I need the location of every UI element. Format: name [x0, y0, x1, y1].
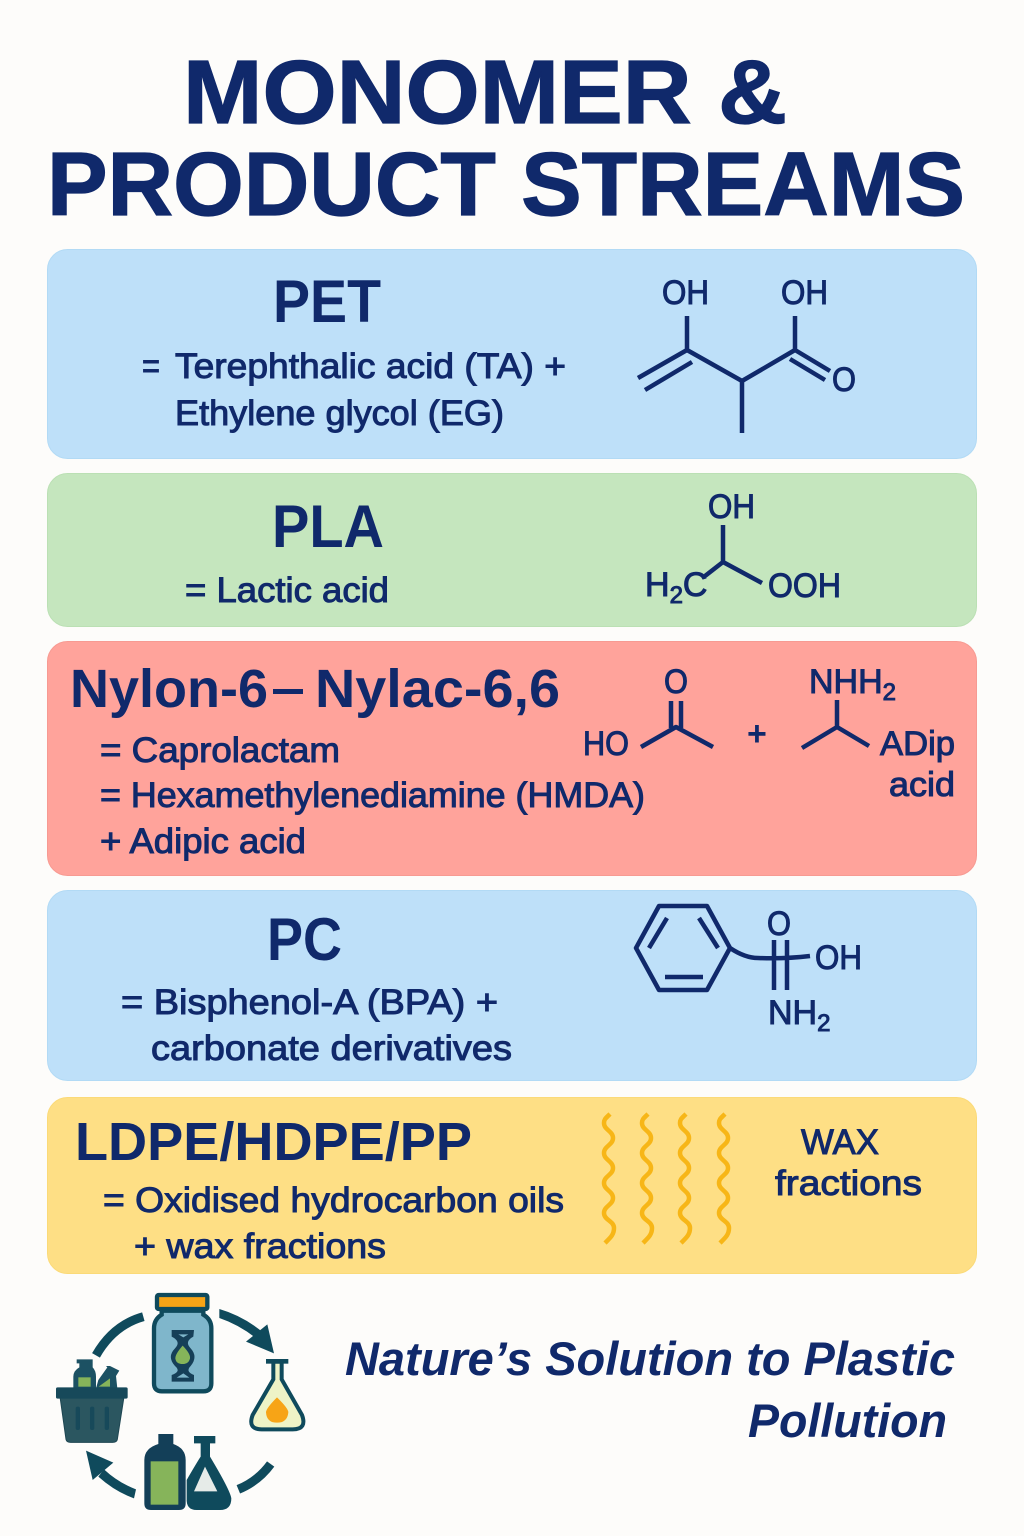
heading: PET: PET	[273, 268, 381, 335]
icon: recycling cycle	[56, 1295, 303, 1510]
panel: PC	[48, 890, 976, 1080]
molecule: Nylon reaction: HO	[583, 725, 629, 763]
molecule: Nylon reaction: acid	[889, 766, 955, 804]
text: polyolefin products: + wax fractions	[134, 1227, 386, 1266]
molecule: lactic acid: H	[645, 566, 670, 604]
molecule: PET structure: O	[832, 361, 856, 399]
text: Nylon monomers	[100, 731, 645, 861]
label: wax fractions: WAX	[801, 1123, 879, 1162]
text: Nylon monomers: = Caprolactam	[100, 731, 340, 770]
molecule: lactic acid: 2	[670, 582, 683, 609]
heading: LDPE/HDPE/PP: LDPE/HDPE/PP	[75, 1112, 472, 1172]
icon: DNA jar	[154, 1295, 211, 1391]
molecule: Nylon reaction: NHH	[809, 663, 883, 701]
panel: Nylon	[48, 642, 976, 876]
molecule: PC structure: OH	[815, 939, 862, 977]
tagline	[345, 1332, 955, 1447]
title	[47, 43, 965, 235]
text: polyolefin products	[103, 1181, 564, 1266]
molecule: PC structure: O	[767, 905, 791, 943]
icon: oil flask	[251, 1359, 303, 1429]
molecule: Nylon reaction: +	[747, 715, 767, 753]
text: PC monomers: carbonate derivatives	[151, 1029, 512, 1068]
text: PET monomers: Ethylene glycol (EG)	[175, 394, 504, 433]
text: Nylon monomers: + Adipic acid	[100, 822, 306, 861]
molecule: PET structure	[638, 274, 856, 433]
text: PC monomers	[121, 983, 512, 1068]
icon: bottles	[144, 1434, 231, 1510]
text: polyolefin products: = Oxidised hydrocarbon oils	[103, 1181, 564, 1220]
molecule: Nylon reaction	[583, 663, 955, 804]
molecule: Nylon reaction: ADip	[880, 725, 955, 763]
molecule: PET structure: OH	[662, 274, 709, 312]
heading: Nylon	[70, 659, 560, 719]
text: PLA monomer: = Lactic acid	[185, 571, 389, 610]
text: PET monomers: Terephthalic acid (TA) +	[175, 347, 566, 386]
arrow: jar to flask	[219, 1309, 274, 1353]
heading: Nylon: Nylon-6	[70, 659, 268, 719]
molecule: lactic acid: C	[683, 566, 707, 604]
tagline: Pollution	[748, 1394, 947, 1447]
heading: PC: PC	[267, 906, 342, 973]
text: PET monomers	[142, 347, 566, 433]
text: PC monomers: = Bisphenol-A (BPA) +	[121, 983, 498, 1022]
molecule: PC structure	[636, 905, 862, 1037]
label: wax fractions: fractions	[775, 1164, 922, 1203]
panel: PLA	[48, 474, 976, 626]
text: Nylon monomers: = Hexamethylenediamine (HMDA)	[100, 776, 645, 815]
molecule: lactic acid: OOH	[768, 567, 841, 605]
panel: PET	[48, 250, 976, 458]
tagline: Nature’s Solution to Plastic	[345, 1332, 955, 1385]
text: PET monomers: =	[142, 347, 160, 386]
arrow: basket to jar	[96, 1317, 143, 1355]
molecule: PC structure: 2	[817, 1010, 830, 1037]
arrow: flask to bottles	[238, 1464, 271, 1489]
arrow: bottles to basket	[86, 1451, 136, 1498]
icon: wax waves	[604, 1114, 729, 1243]
molecule: PET structure: OH	[781, 274, 828, 312]
molecule: Nylon reaction: 2	[883, 679, 896, 706]
heading: Nylon: Nylac-6,6	[315, 659, 560, 719]
title: PRODUCT STREAMS	[47, 135, 965, 235]
molecule: lactic acid: OH	[708, 488, 755, 526]
molecule: PC structure: NH	[768, 994, 817, 1032]
icon: basket	[56, 1359, 128, 1442]
heading: PLA: PLA	[272, 493, 384, 560]
label: wax fractions	[775, 1123, 922, 1203]
title: MONOMER &	[183, 43, 787, 143]
molecule: Nylon reaction: O	[664, 663, 688, 701]
panel: LDPE/HDPE/PP	[48, 1098, 976, 1274]
molecule: lactic acid	[645, 488, 841, 609]
